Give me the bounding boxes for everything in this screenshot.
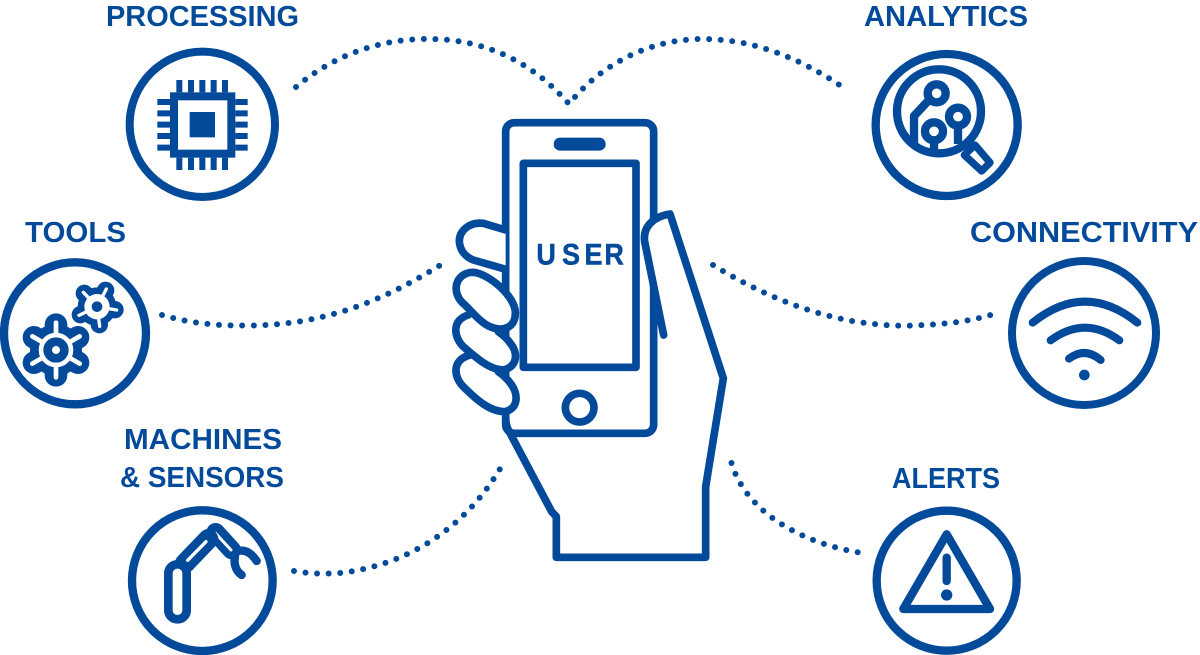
finger one bbox=[459, 223, 506, 269]
finger two bbox=[456, 272, 515, 329]
dotted connectors bbox=[162, 39, 994, 574]
label: user: USER bbox=[536, 238, 624, 272]
icon: magnifier with circuit bbox=[876, 54, 1018, 196]
phone speaker bbox=[554, 138, 606, 151]
thumb mask bbox=[644, 214, 723, 378]
icon: robot arm bbox=[132, 510, 273, 651]
label: machines and sensors: & SENSORS bbox=[120, 462, 284, 494]
icon: warning triangle bbox=[877, 511, 1017, 651]
hand outline bbox=[506, 214, 723, 557]
icon: processor chip bbox=[130, 52, 275, 197]
connector: processing to analytics via user bbox=[296, 39, 844, 104]
connector: machines and sensors bbox=[294, 460, 505, 574]
large gear bbox=[30, 323, 82, 377]
phone screen bbox=[523, 163, 636, 367]
label: machines and sensors bbox=[120, 424, 284, 494]
phone home button bbox=[565, 393, 594, 422]
phone body bbox=[506, 123, 654, 433]
connector: alerts bbox=[732, 463, 869, 554]
connector: tools bbox=[162, 264, 442, 326]
illustration: hand holding phone bbox=[456, 123, 723, 557]
label: processing: PROCESSING bbox=[106, 1, 299, 33]
label: alerts: ALERTS bbox=[892, 463, 1000, 495]
finger four bbox=[456, 355, 516, 412]
label: connectivity: CONNECTIVITY bbox=[970, 217, 1198, 249]
icon: wifi signal bbox=[1012, 261, 1156, 405]
small gear bbox=[78, 287, 117, 326]
label: tools: TOOLS bbox=[25, 217, 126, 249]
connector: connectivity bbox=[713, 265, 994, 326]
finger three bbox=[456, 315, 515, 370]
icon: gears bbox=[4, 262, 146, 404]
label: analytics: ANALYTICS bbox=[864, 1, 1028, 33]
label: machines and sensors: MACHINES bbox=[124, 424, 282, 456]
